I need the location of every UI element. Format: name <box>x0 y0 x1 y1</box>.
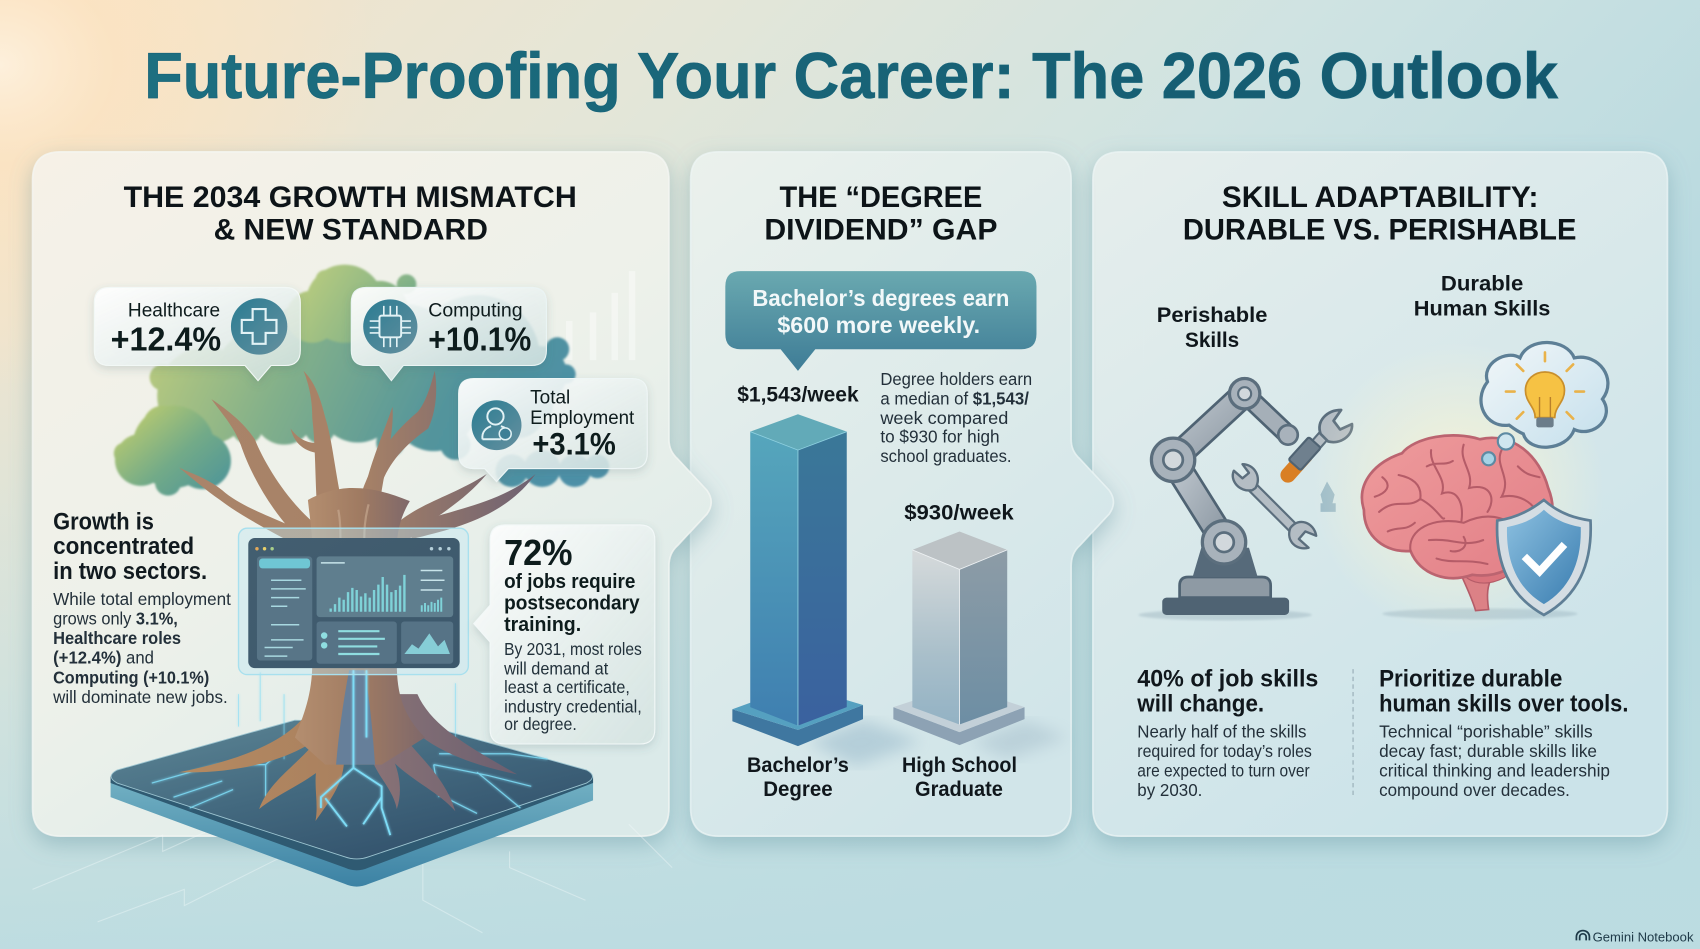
callout: $600 more weekly: $600 more weekly. <box>777 312 980 338</box>
text block: prioritize durable skills: Technical “porishable” skills <box>1379 722 1593 742</box>
heading: skill adaptability <box>1183 181 1576 247</box>
text block: 40% of job skills: 40% of job skills <box>1137 666 1318 693</box>
glowing circuit roots <box>321 670 390 835</box>
platform <box>111 720 593 887</box>
callout: total employment: Employment <box>530 407 635 429</box>
label: durable human skills: Human Skills <box>1414 296 1550 321</box>
label: high school graduate: Graduate <box>915 776 1003 801</box>
text block: degree holders median: Degree holders earn <box>880 369 1032 389</box>
text block: growth is concentrated: (+12.4%) and <box>53 648 154 668</box>
text block: prioritize durable skills <box>1379 666 1628 800</box>
panel: degree dividend gap <box>691 152 1113 836</box>
callout: 72% postsecondary: least a certificate, <box>504 677 630 697</box>
heading: degree dividend <box>764 181 997 247</box>
callout: $600 more weekly <box>725 271 1036 371</box>
callout: computing: +10.1% <box>428 321 531 358</box>
glowing circuit traces on platform <box>152 672 548 813</box>
label: perishable skills: Skills <box>1185 327 1239 352</box>
callout: 72% postsecondary: postsecondary <box>504 592 640 615</box>
callout: 72% postsecondary: By 2031, most roles <box>504 639 642 659</box>
icon: held wrench <box>1288 410 1352 475</box>
callout: $600 more weekly: Bachelor’s degrees earn <box>752 285 1009 311</box>
callout: 72% postsecondary: will demand at <box>503 659 608 679</box>
callout: computing: Computing <box>428 300 523 322</box>
panel: skill adaptability <box>1093 152 1667 836</box>
text block: growth is concentrated: will dominate new jobs. <box>52 687 228 707</box>
heading: growth mismatch <box>124 181 577 247</box>
text block: degree holders median: school graduates. <box>880 446 1012 466</box>
text block: 40% of job skills: by 2030. <box>1137 780 1202 800</box>
label: perishable skills: Perishable <box>1157 302 1267 327</box>
text block: prioritize durable skills: Prioritize durable <box>1379 666 1562 693</box>
text block: prioritize durable skills: human skills over tools. <box>1379 690 1628 717</box>
background circuit traces <box>33 824 672 933</box>
label: high school graduate <box>902 752 1017 801</box>
footer credit: Gemini Notebook: Gemini Notebook <box>1593 929 1694 944</box>
callout: computing <box>351 287 546 381</box>
tree trunk and branches <box>179 371 536 555</box>
bar: high school graduate <box>893 531 1068 759</box>
label: bachelor's degree: Degree <box>763 776 833 801</box>
icon: robot arm with wrench <box>1138 379 1352 620</box>
text block: prioritize durable skills: decay fast; durable skills like <box>1379 741 1597 761</box>
label: perishable skills <box>1157 302 1267 352</box>
callout: 72% postsecondary: 72% <box>504 533 572 573</box>
text block: degree holders median: a median of $1,543/ <box>880 389 1029 409</box>
label: high school graduate: High School <box>902 752 1017 777</box>
callout: total employment: +3.1% <box>532 426 616 461</box>
text block: growth is concentrated: While total employment <box>53 589 231 609</box>
callout: healthcare: Healthcare <box>128 300 220 322</box>
text block: degree holders median: week compared <box>879 408 1008 428</box>
callout: 72% postsecondary <box>474 525 655 744</box>
text block: 40% of job skills: required for today’s roles <box>1137 741 1312 761</box>
text block: growth is concentrated: Growth is <box>53 508 154 535</box>
callout: healthcare: +12.4% <box>111 321 221 358</box>
text block: degree holders median: to $930 for high <box>880 427 1000 447</box>
icon: brain with lightbulb and shield <box>1312 342 1608 634</box>
label: durable human skills: Durable <box>1441 271 1523 296</box>
icon: brain <box>1362 435 1553 611</box>
text block: 40% of job skills: will change. <box>1136 690 1264 717</box>
heading: degree dividend: THE “DEGREE <box>780 181 982 214</box>
text block: growth is concentrated: Computing (+10.1%) <box>53 667 209 687</box>
icon: microchip <box>363 299 417 354</box>
dashboard screen <box>239 528 468 675</box>
callout: 72% postsecondary: or degree. <box>504 714 577 734</box>
tree foliage <box>114 265 609 496</box>
illustration: tree on circuit platform <box>111 265 609 887</box>
title: Future-Proofing Your Career: The 2026 Outlook <box>144 39 1559 112</box>
heading: skill adaptability: SKILL ADAPTABILITY: <box>1222 181 1538 214</box>
panel: growth mismatch <box>33 152 711 933</box>
callout: healthcare <box>94 287 300 381</box>
text block: 40% of job skills: are expected to turn over <box>1137 761 1310 781</box>
label: bachelor's degree <box>747 752 849 801</box>
callout: total employment: Total <box>530 386 570 408</box>
text block: prioritize durable skills: critical thinking and leadership <box>1379 761 1610 781</box>
icon: shield with check <box>1497 500 1591 615</box>
text block: growth is concentrated <box>52 508 231 707</box>
heading: growth mismatch: THE 2034 GROWTH MISMATCH <box>124 181 577 214</box>
label: bachelor's degree: Bachelor’s <box>747 752 849 777</box>
text block: growth is concentrated: in two sectors. <box>53 558 207 585</box>
text block: degree holders median <box>879 369 1032 466</box>
label: durable human skills <box>1414 271 1550 321</box>
icon: person with pin <box>472 400 521 450</box>
text: bachelor value: $1,543/week <box>737 381 860 406</box>
icon: medical cross <box>231 298 287 355</box>
bar: bachelor's degree <box>732 414 922 766</box>
text block: growth is concentrated: Healthcare roles <box>53 628 181 648</box>
callout: 72% postsecondary: industry credential, <box>504 697 642 717</box>
callout: 72% postsecondary: of jobs require <box>504 570 635 593</box>
text block: growth is concentrated: grows only 3.1%, <box>53 609 178 629</box>
heading: growth mismatch: & NEW STANDARD <box>214 214 488 247</box>
text block: 40% of job skills: Nearly half of the skills <box>1137 722 1307 742</box>
callout: total employment <box>459 379 647 482</box>
heading: skill adaptability: DURABLE VS. PERISHABLE <box>1183 214 1576 247</box>
icon: loose wrench <box>1233 464 1316 548</box>
heading: degree dividend: DIVIDEND” GAP <box>764 214 997 247</box>
tree trunk base and roots <box>179 664 517 821</box>
callout: 72% postsecondary: training. <box>504 613 581 636</box>
text block: growth is concentrated: concentrated <box>53 533 194 560</box>
text block: prioritize durable skills: compound over decades. <box>1379 780 1570 800</box>
text block: 40% of job skills <box>1136 666 1318 800</box>
icon: thought cloud with lightbulb <box>1481 342 1608 465</box>
text: high school value: $930/week <box>904 500 1015 525</box>
